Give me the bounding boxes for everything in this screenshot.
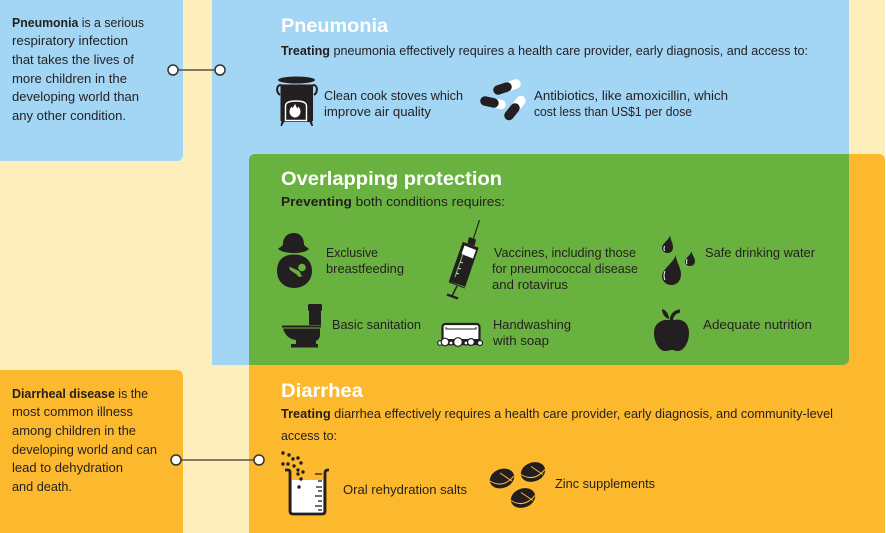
text: prevention intro: Preventing both conditions requires: xyxy=(281,195,505,209)
icon: apple xyxy=(654,309,689,351)
text: diarrhea treatment intro xyxy=(281,407,833,443)
icon: breastfeeding xyxy=(277,233,312,288)
icon: soap xyxy=(438,324,482,346)
icon: zinc supplements xyxy=(487,459,548,511)
icon: cook stove xyxy=(277,76,317,126)
text: diarrhea treatment intro: access to: xyxy=(281,429,337,443)
panel: diarrheal disease definition: Diarrheal disease is the xyxy=(12,387,148,401)
panel: diarrheal disease definition: among children in the xyxy=(12,424,136,438)
text: antibiotics: cost less than US$1 per dose xyxy=(534,105,692,119)
heading: pneumonia: Pneumonia xyxy=(281,16,388,37)
text: handwashing with soap: Handwashing xyxy=(493,318,571,332)
panel: pneumonia definition: that takes the lives of xyxy=(12,53,135,67)
icon: toilet xyxy=(282,304,322,348)
text: antibiotics: Antibiotics, like amoxicillin, which xyxy=(534,89,728,103)
panel: overlapping protection xyxy=(249,154,849,365)
text: zinc supplements: Zinc supplements xyxy=(555,477,655,491)
panel: diarrheal disease definition: developing world and can xyxy=(12,443,157,457)
text: exclusive breastfeeding xyxy=(326,246,404,276)
icon: oral rehydration beaker xyxy=(281,451,329,514)
panel: pneumonia xyxy=(212,0,849,365)
icon: syringe xyxy=(447,220,480,298)
text: pneumonia treatment intro: Treating pneumonia effectively requires a health care provider, early diagnosis, and access to: xyxy=(281,44,808,58)
panel: diarrheal disease definition: and death. xyxy=(12,480,72,494)
text: vaccines: Vaccines, including those xyxy=(494,246,636,260)
heading: diarrhea: Diarrhea xyxy=(281,381,363,402)
text: exclusive breastfeeding: Exclusive xyxy=(326,246,378,260)
text: clean cook stoves xyxy=(324,89,463,119)
text: clean cook stoves: improve air quality xyxy=(324,105,432,119)
text: diarrhea treatment intro: Treating diarrhea effectively requires a health care provider, early diagnosis, and community-level xyxy=(281,407,833,421)
text: vaccines xyxy=(492,246,638,292)
panel: diarrheal disease definition: most common illness xyxy=(12,405,133,419)
panel: pneumonia definition xyxy=(0,0,183,161)
connector: pneumonia xyxy=(168,65,225,75)
panel: pneumonia definition: any other condition. xyxy=(12,109,126,123)
heading: overlapping protection: Overlapping protection xyxy=(281,169,502,190)
text: clean cook stoves: Clean cook stoves which xyxy=(324,89,463,103)
panel: diarrheal disease definition: lead to dehydration xyxy=(12,461,123,475)
text: vaccines: for pneumococcal disease xyxy=(492,262,638,276)
text: handwashing with soap: with soap xyxy=(492,334,549,348)
text: adequate nutrition: Adequate nutrition xyxy=(703,318,812,332)
icon: antibiotic capsules xyxy=(485,84,521,116)
panel: pneumonia definition: developing world than xyxy=(12,90,139,104)
text: basic sanitation: Basic sanitation xyxy=(332,318,421,332)
text: handwashing with soap xyxy=(492,318,571,348)
text: antibiotics xyxy=(534,89,728,119)
connector: diarrhea xyxy=(171,455,264,465)
panel: pneumonia definition: Pneumonia is a serious xyxy=(12,16,144,30)
text: vaccines: and rotavirus xyxy=(492,278,568,292)
panel: pneumonia definition: respiratory infection xyxy=(12,34,128,48)
icon: water drops xyxy=(662,235,695,285)
text: safe drinking water: Safe drinking water xyxy=(705,246,815,260)
panel: diarrheal disease definition xyxy=(0,370,183,533)
panel: diarrhea xyxy=(249,154,885,533)
text: exclusive breastfeeding: breastfeeding xyxy=(326,262,404,276)
text: oral rehydration salts: Oral rehydration salts xyxy=(343,483,467,497)
panel: pneumonia definition: more children in the xyxy=(12,72,127,86)
